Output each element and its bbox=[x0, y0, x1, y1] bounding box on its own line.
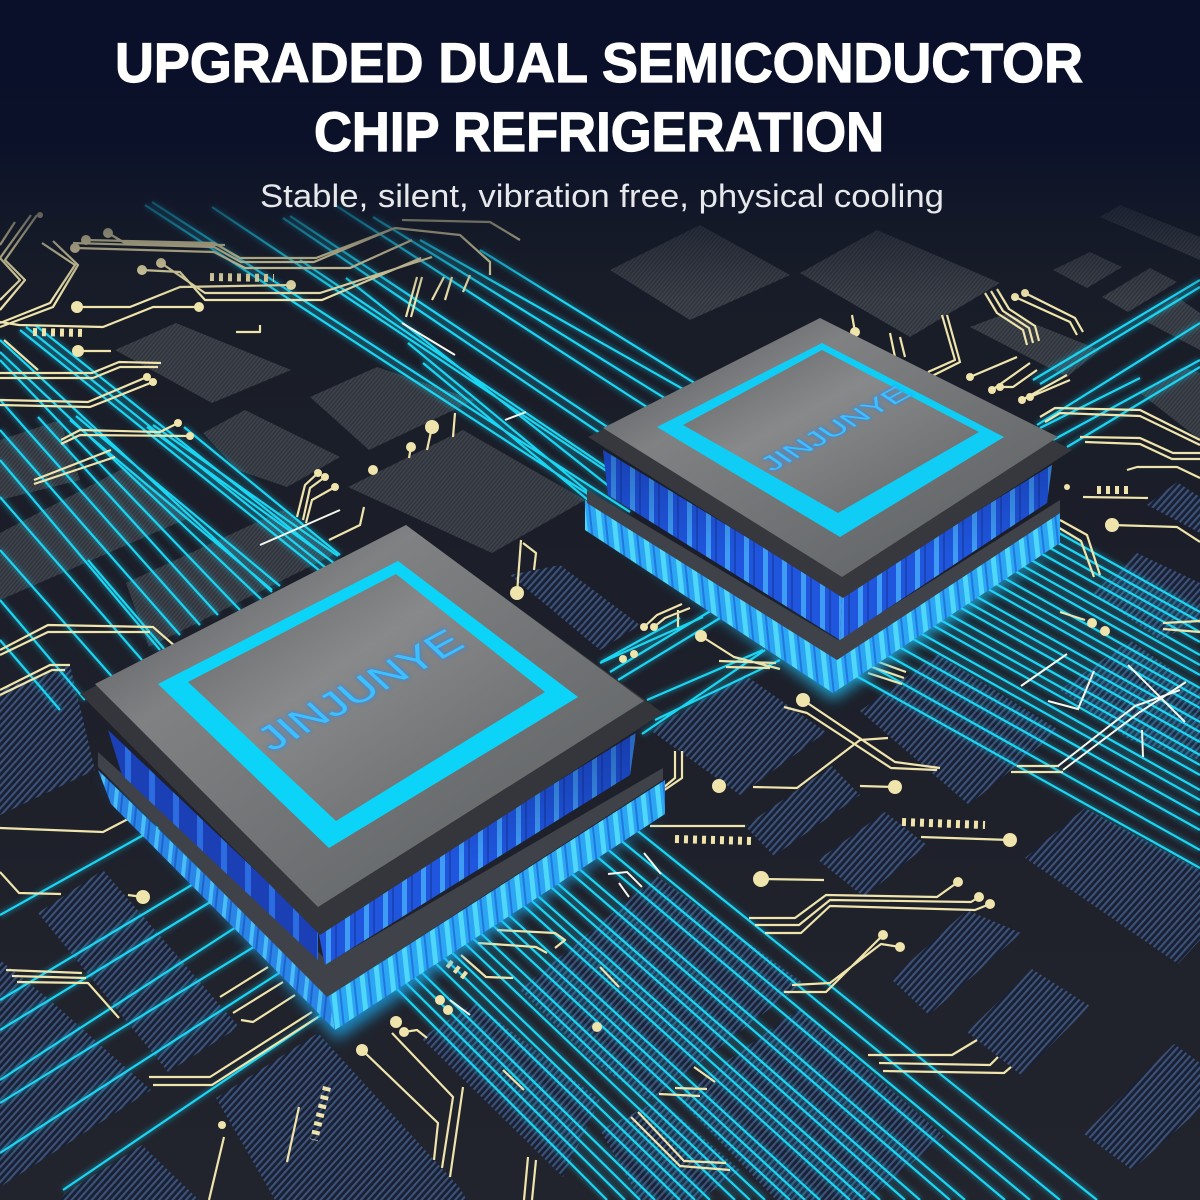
chip 2 glow bbox=[585, 515, 1062, 700]
chip 2 blue fins bbox=[603, 450, 1052, 640]
chip 2 (rear) bbox=[585, 318, 1072, 700]
chip 2 logo: JINJUNYE bbox=[753, 382, 917, 475]
chip 2 lower plate bbox=[587, 490, 1060, 660]
chip 1 glass base bbox=[98, 770, 665, 1030]
chip 1 lower plate bbox=[98, 752, 663, 997]
title bbox=[115, 31, 1083, 163]
title: CHIP REFRIGERATION bbox=[314, 100, 884, 163]
chip 1 (front) bbox=[80, 525, 665, 1040]
subtitle: Stable, silent, vibration free, physical cooling bbox=[260, 178, 944, 214]
chip 2 glass base bbox=[585, 500, 1060, 693]
top fade overlay bbox=[0, 0, 1200, 300]
chip 1 top plate bbox=[80, 525, 663, 935]
chip 1 logo: JINJUNYE bbox=[247, 623, 473, 758]
chip 2 logo: JINJUNYE bbox=[753, 382, 917, 475]
white-lit traces bbox=[260, 323, 1186, 1015]
gold trace pads bbox=[37, 212, 1119, 1129]
chip 1 glow bbox=[98, 775, 665, 1040]
chip 1 blue fins bbox=[108, 730, 636, 965]
gold arrow strips bbox=[33, 277, 1130, 1140]
chip 2 top plate bbox=[588, 318, 1072, 598]
title: UPGRADED DUAL SEMICONDUCTOR bbox=[115, 31, 1083, 94]
chip 1 logo: JINJUNYE bbox=[247, 623, 473, 758]
